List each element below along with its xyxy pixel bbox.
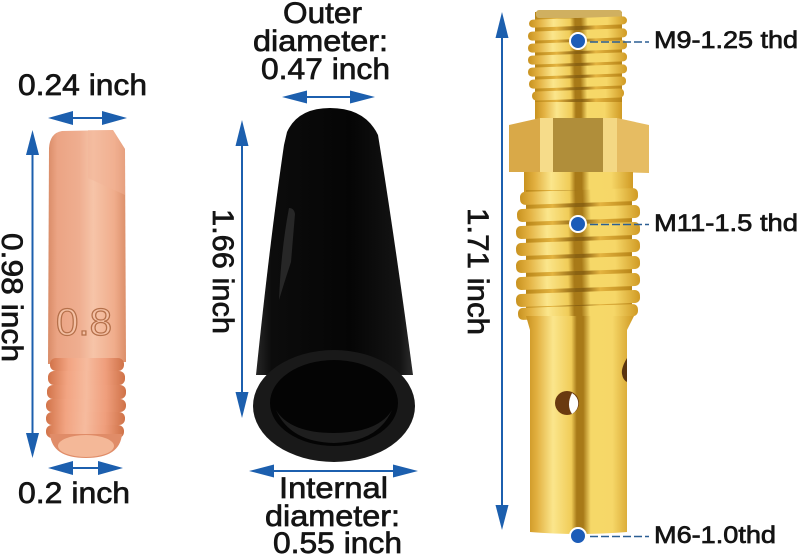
label: outer diameter xyxy=(253,0,390,86)
arrow: tip length xyxy=(26,130,39,458)
callout: M11 thread: M11-1.5 thd xyxy=(654,210,798,237)
sleeve opening xyxy=(270,360,398,446)
arrow: sleeve length xyxy=(236,120,248,418)
diffuser top thread core xyxy=(535,12,622,104)
arrow: outer diameter xyxy=(282,90,375,104)
diffuser lower thread core xyxy=(526,190,632,318)
label: outer diameter: 0.47 inch xyxy=(261,53,390,86)
diffuser hex nut xyxy=(509,118,649,173)
callout: M9 thread xyxy=(570,27,798,54)
diffuser lower neck xyxy=(524,172,633,192)
label: diffuser length: 1.71 inch xyxy=(461,208,494,335)
panel: copper contact tip xyxy=(0,69,147,510)
label: sleeve length: 1.66 inch xyxy=(206,209,239,334)
copper tip body xyxy=(48,130,126,364)
gas hole side xyxy=(622,358,627,382)
label: tip diameter top: 0.24 inch xyxy=(18,69,147,102)
callout: M11 thread xyxy=(570,210,798,237)
arrow: tip bottom width xyxy=(48,461,123,475)
gas hole front xyxy=(555,391,579,415)
diffuser top thread teeth xyxy=(528,10,627,101)
copper tip thread xyxy=(46,358,126,438)
label: internal diameter: diameter: xyxy=(265,500,400,533)
callout: M9 thread: M9-1.25 thd xyxy=(654,27,798,54)
label: internal diameter xyxy=(265,472,402,558)
callout: M6 thread: M6-1.0thd xyxy=(654,522,776,549)
label: outer diameter: diameter: xyxy=(253,25,388,58)
copper tip end bore xyxy=(50,434,122,458)
tip face detail xyxy=(88,130,125,195)
sleeve highlight xyxy=(279,208,295,300)
arrow: internal diameter xyxy=(249,464,418,478)
diffuser shank xyxy=(526,316,634,534)
sleeve flange xyxy=(253,350,415,462)
arrow: diffuser length xyxy=(496,12,508,530)
arrow: tip top width xyxy=(48,111,127,125)
diffuser upper neck xyxy=(535,102,622,119)
engraved size mark: 0.8 xyxy=(56,302,112,344)
label: internal diameter: Internal xyxy=(279,472,388,505)
callout: M6 thread xyxy=(570,522,776,549)
sleeve body xyxy=(256,108,413,375)
panel: brass gas diffuser xyxy=(461,10,798,549)
diffuser lower thread teeth xyxy=(516,188,640,320)
sleeve inner ledge xyxy=(276,410,392,443)
label: tip diameter bottom: 0.2 inch xyxy=(18,477,130,510)
panel: black insulator sleeve xyxy=(206,0,418,558)
